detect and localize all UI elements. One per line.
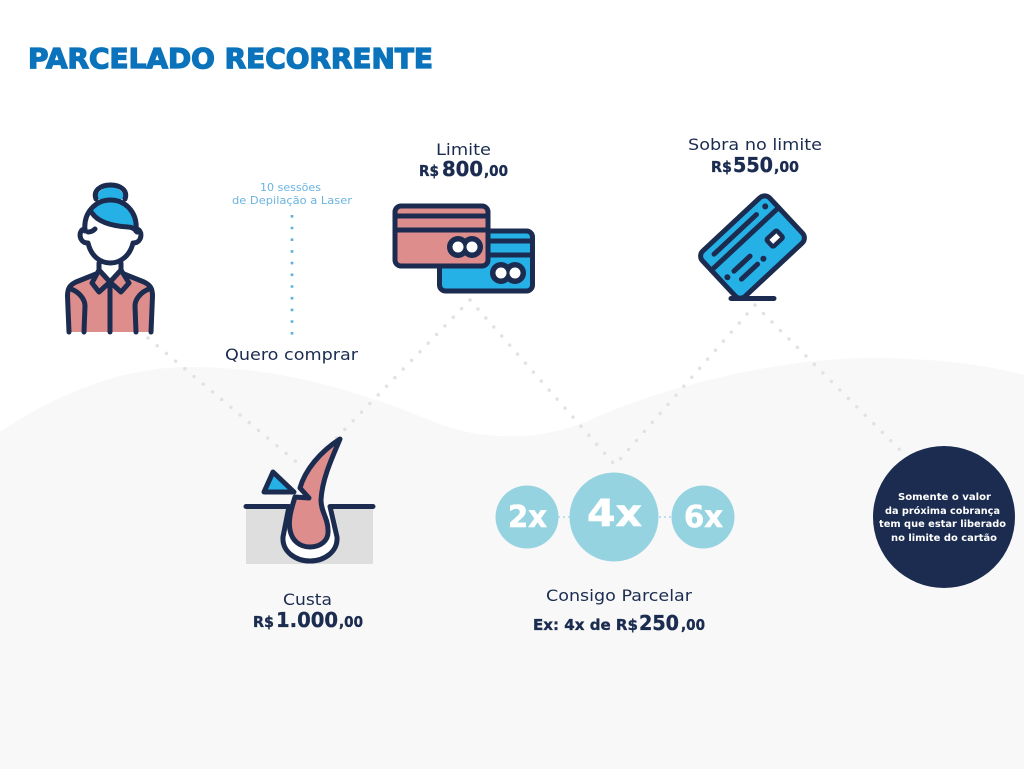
installment options: 2x (508, 500, 547, 535)
label: 10 sessões de Depilação a Laser: de Depilação a Laser (232, 194, 352, 207)
heading: Sobra no limite R$550,00: ,00 (774, 158, 799, 176)
dotted blue vertical connector (291, 215, 293, 335)
callout: navy circle: no limite do cartão (891, 533, 997, 544)
label: Consigo Parcelar: 250 (639, 611, 679, 635)
heading: Limite R$800,00: Limite (436, 140, 491, 159)
callout: navy circle: da próxima cobrança (885, 506, 1000, 517)
label: Consigo Parcelar (533, 586, 705, 635)
label: Consigo Parcelar: ,00 (681, 616, 705, 634)
background wave (0, 358, 1024, 769)
heading: Limite R$800,00: R$ (419, 162, 439, 180)
label: Quero comprar: Quero comprar (225, 345, 358, 364)
heading: Sobra no limite R$550,00: Sobra no limite (688, 135, 822, 154)
callout: navy circle: tem que estar liberado (879, 519, 1006, 530)
icon: woman customer (67, 185, 153, 332)
label: Consigo Parcelar: Ex: 4x de R$ (533, 616, 638, 634)
label: Custa R$1.000,00: 1.000 (276, 608, 338, 632)
callout: navy circle: Somente o valor (898, 492, 991, 503)
heading: Sobra no limite R$550,00: R$ (711, 158, 732, 176)
installment options (496, 472, 734, 562)
installment options: 4x (587, 492, 642, 535)
label: Consigo Parcelar: Consigo Parcelar (546, 586, 692, 605)
icon: tilted credit card (698, 193, 807, 301)
heading: Sobra no limite R$550,00 (688, 135, 822, 177)
label: 10 sessões de Depilação a Laser (232, 181, 352, 207)
label: Custa R$1.000,00 (253, 590, 363, 632)
heading: Limite R$800,00: ,00 (484, 162, 508, 180)
heading: Sobra no limite R$550,00: 550 (733, 153, 773, 177)
title: PARCELADO RECORRENTE (28, 43, 433, 75)
installment options: 6x (684, 500, 723, 535)
callout: navy circle (873, 446, 1015, 588)
icon: two credit cards (395, 206, 532, 291)
heading: Limite R$800,00 (419, 140, 508, 181)
icon: hair follicle (246, 439, 373, 564)
label: Custa R$1.000,00: Custa (283, 590, 332, 609)
label: Custa R$1.000,00: ,00 (339, 613, 363, 631)
label: Custa R$1.000,00: R$ (253, 613, 274, 631)
dotted connector lines (148, 300, 905, 465)
heading: Limite R$800,00: 800 (442, 157, 483, 181)
label: 10 sessões de Depilação a Laser: 10 sessões (260, 181, 321, 194)
